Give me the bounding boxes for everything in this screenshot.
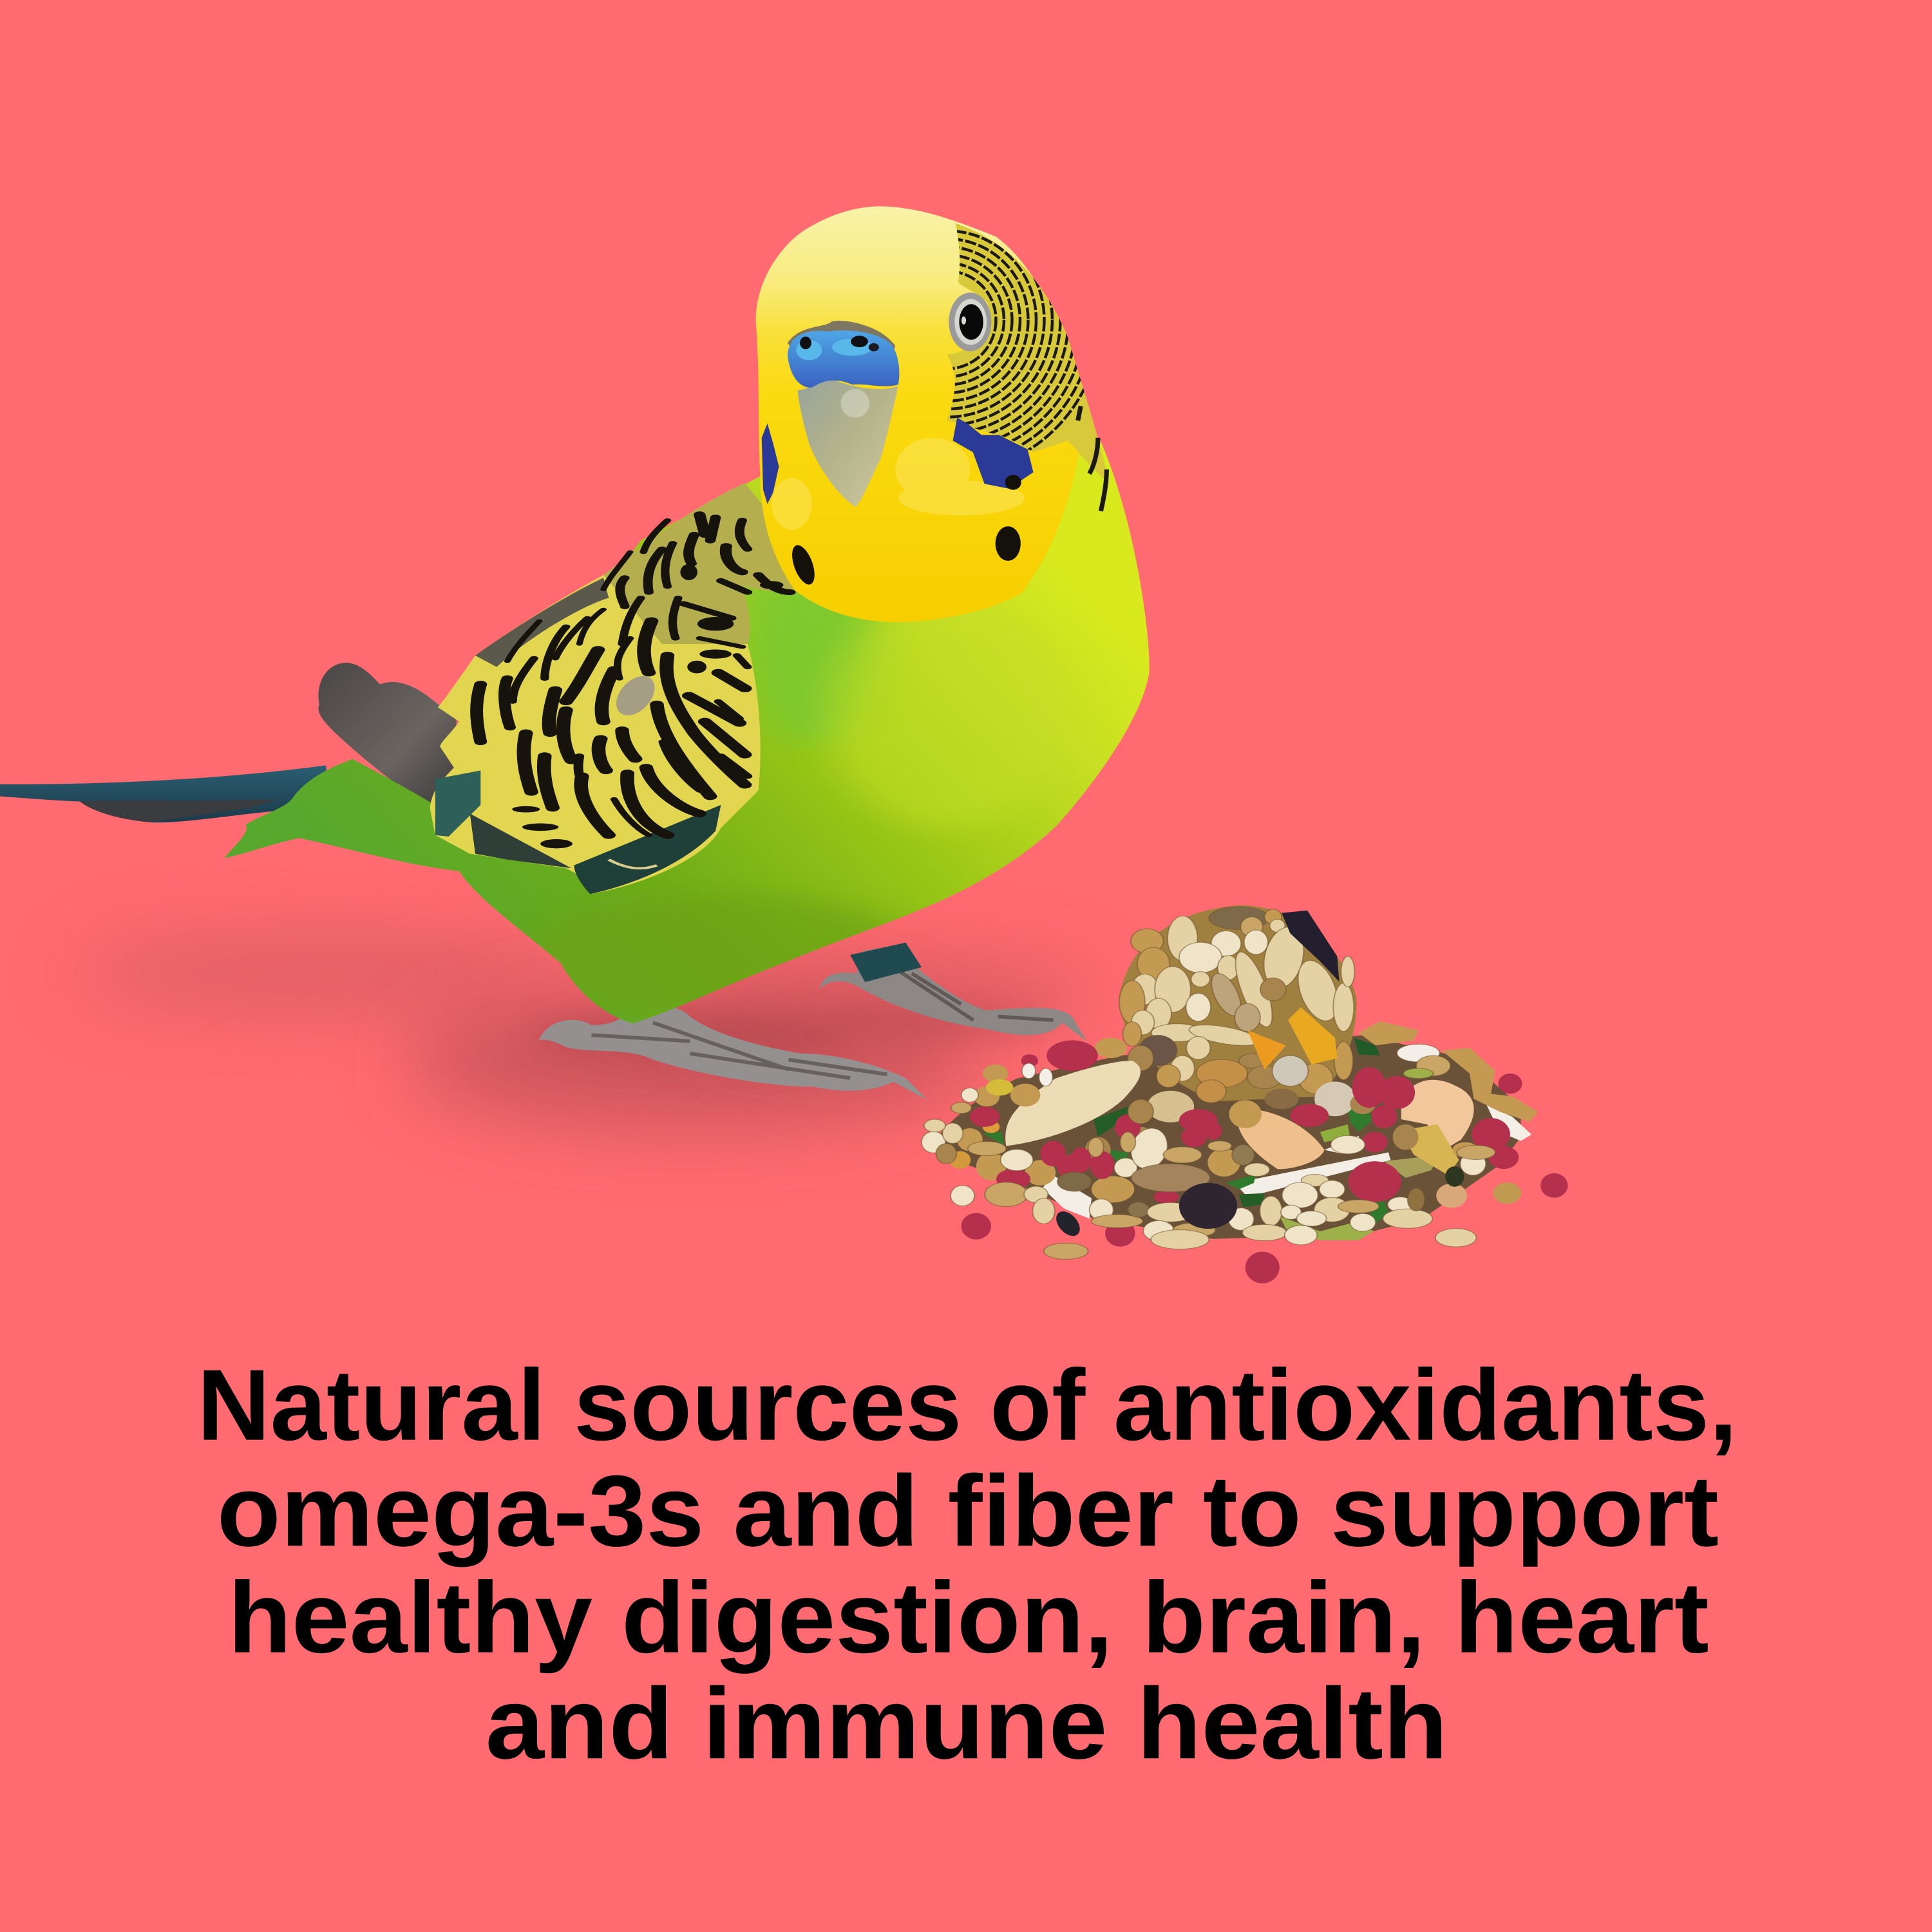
- tail dark vane: [80, 799, 278, 822]
- blue cheek patch right: [953, 418, 1034, 489]
- blue tail feathers: [0, 765, 331, 822]
- mango pieces: [1288, 1007, 1337, 1065]
- small pale feather tuft: [609, 674, 661, 717]
- spot below cheek: [1005, 475, 1021, 490]
- tail, body and wing: [0, 440, 1150, 1023]
- caption line 1: Natural sources of antioxidants,: [197, 1349, 1738, 1462]
- striped nape: [947, 223, 1110, 511]
- back foot: [819, 946, 1087, 1041]
- caption: [197, 1349, 1738, 1780]
- dried leaf greens: [983, 1037, 1440, 1240]
- back foot scales: [893, 967, 1054, 1020]
- green body: [224, 440, 1150, 1023]
- pile shadow base: [936, 1035, 1521, 1239]
- blue cheek patch left: [762, 423, 779, 504]
- eye: [949, 292, 991, 351]
- front foot: [538, 998, 928, 1101]
- cream and tan seeds: [922, 1044, 1495, 1260]
- dark fig on ball: [1282, 911, 1340, 981]
- wing: [430, 483, 796, 894]
- pale face scallops: [772, 438, 1025, 530]
- bird feet: [538, 943, 1087, 1101]
- caption line 4: and immune health: [486, 1667, 1448, 1780]
- beak: [798, 380, 898, 507]
- wing stripes: [477, 515, 790, 835]
- leg band: [850, 943, 922, 982]
- dark seeds: [1052, 1166, 1464, 1238]
- infographic canvas: [0, 206, 1731, 1759]
- papaya pieces: [1237, 1080, 1474, 1169]
- loose pellets: [961, 1173, 1568, 1283]
- bird: [0, 166, 1150, 1101]
- grey flight feather: [318, 663, 457, 808]
- front foot scales: [591, 1023, 887, 1078]
- lower nape marks: [1078, 406, 1106, 511]
- wing grey shoulder: [475, 578, 609, 667]
- coconut strips: [1043, 1105, 1531, 1218]
- caption line 2: omega-3s and fiber to support: [217, 1455, 1719, 1567]
- dark surround of cere: [788, 321, 895, 354]
- head base with pale crown: [756, 206, 1085, 622]
- flat grain chip: [1005, 1061, 1141, 1146]
- caption line 3: healthy digestion, brain, heart: [228, 1562, 1709, 1674]
- head: [756, 166, 1110, 622]
- wing olive upper shade: [603, 483, 796, 644]
- beak highlight: [840, 389, 869, 418]
- wing dark feathers: [435, 770, 721, 894]
- tan kibble pieces: [949, 1021, 1538, 1208]
- wing dark marks: [512, 564, 783, 848]
- throat spot left: [788, 542, 819, 587]
- body shading: [518, 506, 1074, 1021]
- throat spot right: [996, 526, 1021, 561]
- seed ball: [1119, 905, 1356, 1103]
- ground shadow: [74, 939, 1097, 1128]
- food pile: [922, 905, 1568, 1283]
- red berry pellets: [970, 1040, 1522, 1247]
- blue cere: [788, 330, 899, 388]
